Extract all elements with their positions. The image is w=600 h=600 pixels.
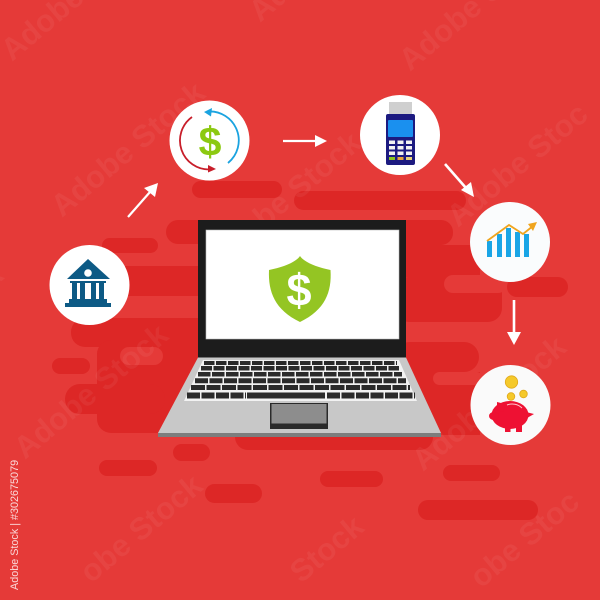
stock watermarks: Adobe Stock	[200, 124, 368, 273]
stock watermarks: Adobe Stock	[405, 328, 573, 477]
stock watermarks: Adobe Stock	[44, 74, 212, 223]
icon: security shield with dollar	[269, 256, 331, 322]
arrow: bank to exchange	[128, 183, 158, 217]
laptop lid	[198, 220, 406, 358]
laptop base	[158, 358, 441, 433]
stock id credit: Adobe Stock | #302675079	[9, 460, 21, 590]
stock watermarks: Adobe Stoc	[440, 96, 594, 233]
keyboard	[184, 360, 417, 401]
icon: gold coins	[505, 376, 527, 400]
stock watermarks: obe Stock	[73, 467, 210, 589]
stock watermarks: Adobe Stock	[237, 274, 405, 423]
stock watermarks: Adobe Stock	[7, 316, 175, 465]
laptop screen	[206, 230, 399, 339]
icon: dollar with cycle arrows: $	[199, 118, 222, 164]
arrow: terminal to chart	[445, 164, 474, 197]
icon: piggy bank	[489, 401, 534, 432]
step circle: piggy bank savings	[470, 365, 550, 445]
icon: bank building	[65, 259, 111, 307]
step circle: money exchange	[170, 100, 250, 180]
stock watermarks: Stock	[283, 508, 371, 589]
icon: rising bar chart	[487, 222, 537, 257]
laptop	[158, 220, 441, 437]
icon: security shield with dollar: $	[286, 264, 312, 316]
arrow: exchange to terminal	[283, 135, 327, 147]
stock watermarks: obe Stoc	[463, 483, 586, 594]
step circle: growth chart	[470, 202, 550, 282]
step circle: card terminal	[360, 95, 440, 175]
touchpad	[270, 403, 328, 429]
step circle: bank	[50, 245, 130, 325]
background streak shapes	[52, 181, 568, 520]
icon: payment terminal	[386, 102, 415, 165]
arrow: chart to piggy bank	[507, 300, 521, 345]
